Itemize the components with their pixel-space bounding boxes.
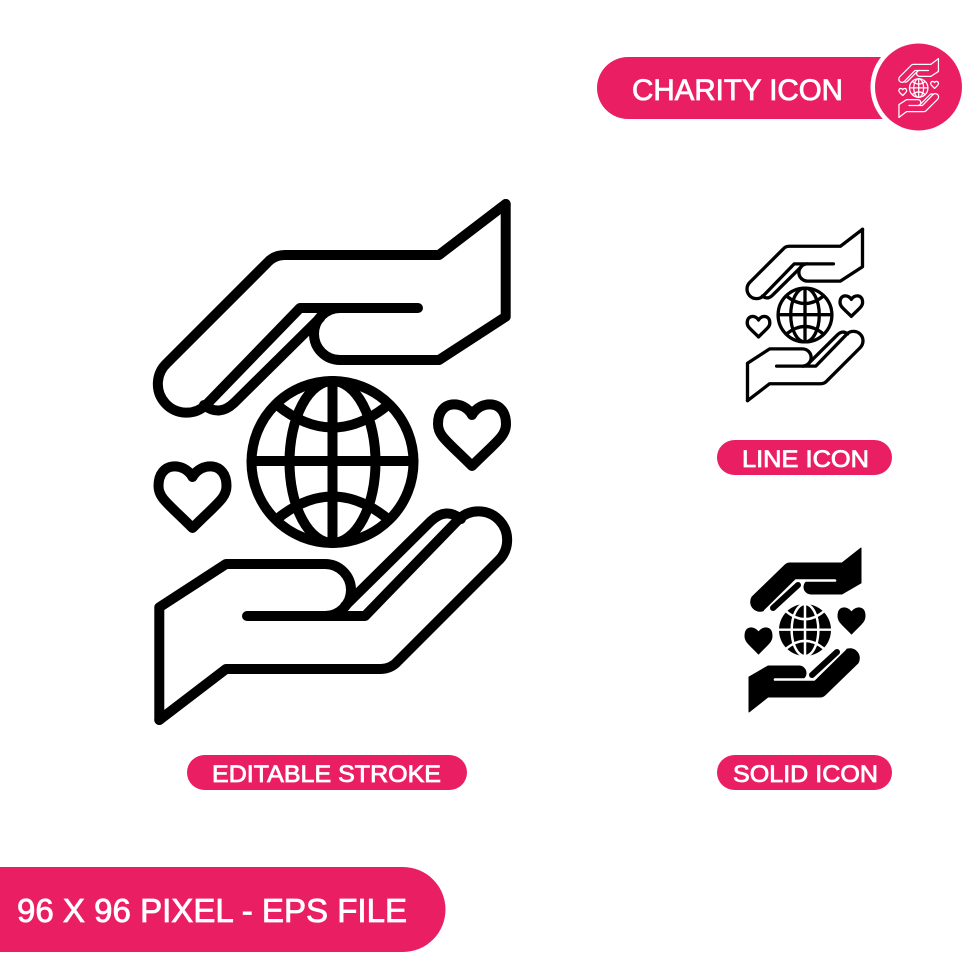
solid lower hand: [749, 649, 859, 712]
header ring: [870, 39, 966, 135]
label: solid icon: SOLID ICON: [733, 761, 878, 788]
header circle: [875, 44, 962, 130]
header pill: [597, 57, 917, 119]
label: editable stroke: [187, 755, 467, 790]
solid globe: [779, 604, 831, 656]
label: editable stroke: EDITABLE STROKE: [212, 761, 441, 788]
footer banner: file format: 96 X 96 PIXEL - EPS FILE: [17, 892, 407, 929]
icon: solid icon preview: [745, 548, 865, 712]
footer banner: file format: [0, 867, 446, 952]
solid left heart: [745, 628, 772, 654]
icon: main outline charity icon: [158, 204, 507, 720]
label: line icon: LINE ICON: [742, 446, 869, 473]
icon: small white charity icon: [899, 59, 939, 117]
label: line icon: [717, 440, 892, 475]
header title: CHARITY ICON: [632, 74, 843, 107]
solid right heart: [838, 608, 865, 634]
label: solid icon: [717, 755, 892, 790]
icon: line icon preview: [747, 229, 863, 401]
solid upper hand: [751, 548, 861, 611]
header badge: charity icon: [597, 39, 966, 135]
